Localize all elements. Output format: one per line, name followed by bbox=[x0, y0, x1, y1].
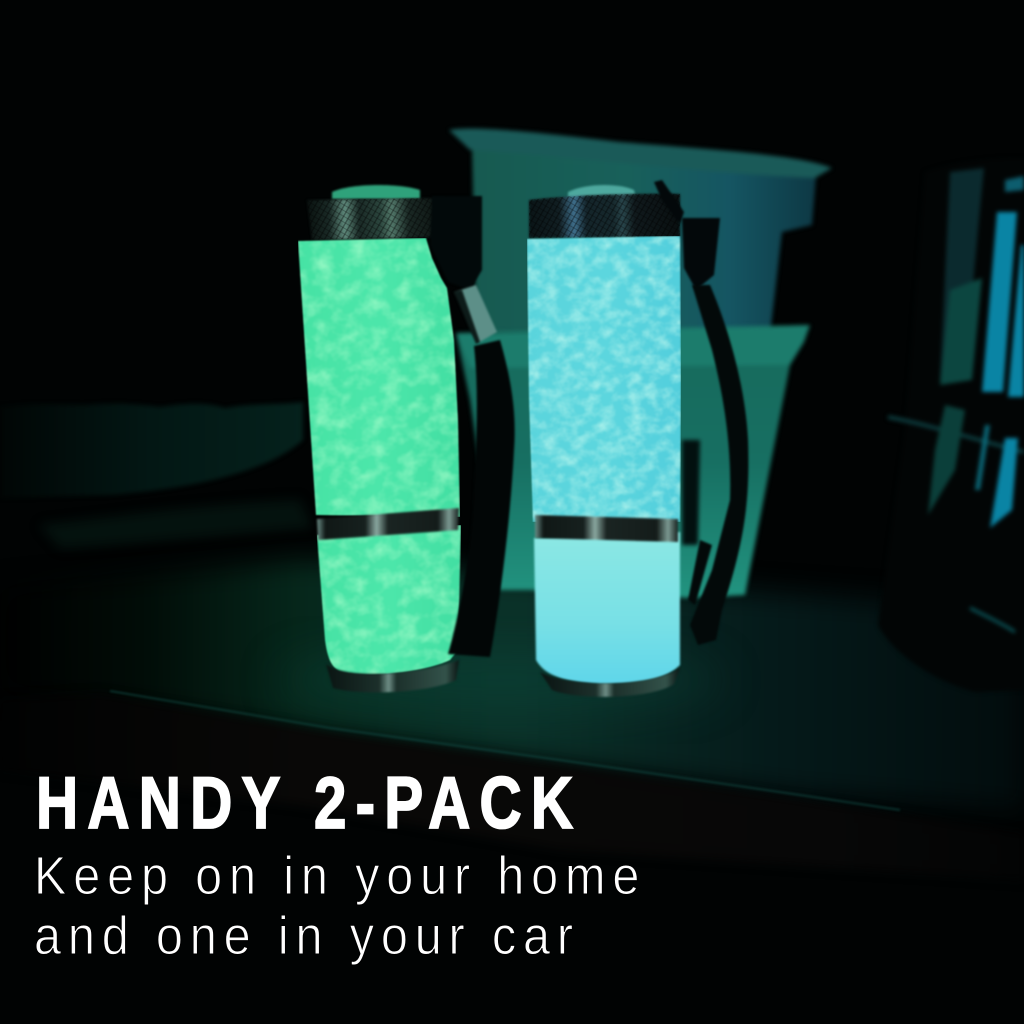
upper storage tub bbox=[449, 128, 832, 335]
blue head bbox=[529, 194, 680, 238]
green strap clip bbox=[454, 285, 497, 344]
blue flashlight bbox=[527, 180, 748, 697]
blue lens glow bbox=[568, 185, 636, 198]
blue base bbox=[540, 668, 680, 697]
blue strap top bbox=[654, 180, 684, 224]
bowl on the left bbox=[0, 402, 312, 548]
green strap loop bbox=[430, 196, 482, 290]
green lens glow bbox=[332, 185, 420, 199]
green body upper bbox=[298, 238, 460, 517]
blue body upper bbox=[527, 236, 681, 522]
green wrist strap bbox=[448, 340, 515, 657]
blue strap inner loop bbox=[688, 540, 712, 605]
floor glow bbox=[280, 648, 720, 712]
lower storage tub bbox=[456, 325, 810, 598]
green body lower bbox=[317, 525, 461, 675]
heading: HANDY 2-PACK bbox=[36, 763, 582, 845]
blue body lower bbox=[534, 532, 680, 684]
green base bbox=[326, 660, 459, 692]
green head bbox=[307, 198, 448, 240]
green metal ring bbox=[317, 508, 459, 540]
subheading line 2: and one in your car bbox=[34, 905, 580, 966]
shelf front edge highlight bbox=[110, 691, 900, 810]
green flashlight bbox=[298, 185, 515, 692]
blue metal ring bbox=[535, 515, 678, 542]
blue wrist strap bbox=[690, 285, 748, 645]
shelf front face bbox=[0, 694, 1024, 880]
steel pot on the right bbox=[878, 158, 1024, 692]
subheading line 1: Keep on in your home bbox=[34, 845, 646, 906]
shelf surface bbox=[0, 560, 1024, 810]
